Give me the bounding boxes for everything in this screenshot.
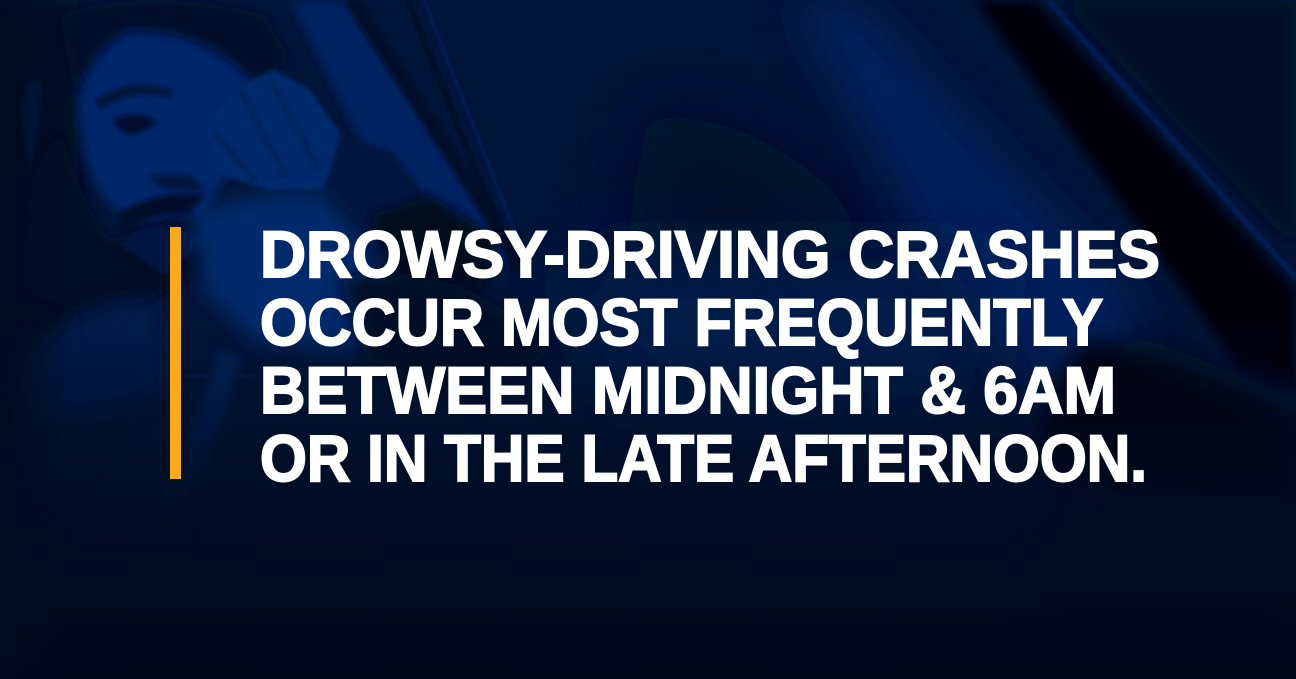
dark vignette on left edge (0, 0, 70, 679)
headline text (260, 218, 1160, 495)
raised forearm (190, 192, 560, 400)
car interior: dark area behind centre (560, 0, 1296, 679)
headline text: OCCUR MOST FREQUENTLY (260, 286, 1103, 359)
eye (112, 114, 158, 134)
lower hand and shirt (25, 299, 255, 560)
dark gradient fade at bottom (0, 320, 1296, 679)
eyebrow (95, 85, 172, 110)
moustache (118, 194, 205, 232)
ear (20, 79, 42, 170)
nose shadow (150, 175, 205, 191)
car window frame (290, 0, 530, 270)
headline text: BETWEEN MIDNIGHT & 6AM (260, 354, 1116, 427)
driver head, hair and beard (0, 0, 290, 340)
orange accent bar (170, 227, 181, 479)
headline text: OR IN THE LATE AFTERNOON. (260, 422, 1147, 495)
headline text: DROWSY-DRIVING CRASHES (260, 218, 1160, 291)
hand rubbing eye (205, 70, 500, 290)
